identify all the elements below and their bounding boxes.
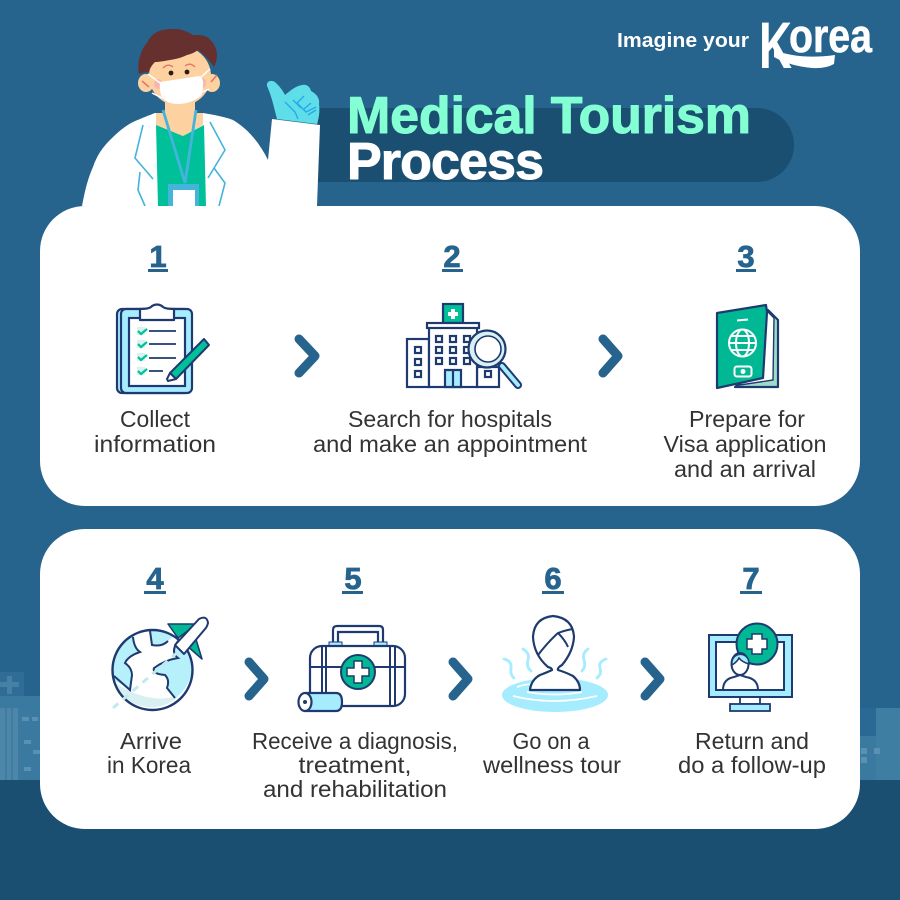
- thumbs-up glove: [267, 81, 319, 124]
- logo wordmark: K: [759, 8, 792, 82]
- neck: [156, 95, 203, 136]
- step 3 number: 3: [737, 239, 755, 274]
- logo wordmark: orea: [789, 9, 873, 62]
- coat body: [82, 113, 320, 206]
- step 6 number: 6: [544, 561, 562, 596]
- arrow: [299, 339, 315, 373]
- step 6 label: wellness tour: [482, 752, 621, 778]
- step 2 number: 2: [443, 239, 461, 274]
- icon: telemedicine monitor: [709, 624, 792, 711]
- face: [138, 46, 220, 106]
- arrow: [453, 662, 468, 696]
- step 4 number: 4: [146, 561, 164, 596]
- step 6 label: Go on a: [512, 728, 590, 754]
- step 1 label: information: [94, 431, 216, 457]
- step 1 number: 1: [149, 239, 167, 274]
- step 7 label: [678, 728, 826, 778]
- step 2 label: and make an appointment: [313, 431, 587, 457]
- step 3 label: [664, 406, 826, 482]
- step 7 number: 7: [742, 561, 760, 596]
- panel: steps 1 to 3: [40, 206, 860, 506]
- panel: steps 4 to 7: [40, 529, 860, 829]
- step 3 label: Visa application: [664, 431, 826, 457]
- step 2 label: [313, 406, 587, 457]
- icon: clipboard: [117, 304, 209, 393]
- lanyard and badge: [163, 110, 199, 206]
- step 4 label: Arrive: [120, 728, 182, 754]
- arrow: [603, 339, 618, 373]
- title banner: [318, 108, 794, 182]
- title line 2: Process: [347, 133, 544, 191]
- step 3 label: and an arrival: [674, 456, 816, 482]
- step 5 label: [252, 728, 458, 802]
- logo wordmark: [759, 8, 873, 82]
- step 6 label: [482, 728, 621, 778]
- step 7 label: Return and: [695, 728, 809, 754]
- step 5 label: Receive a diagnosis,: [252, 728, 458, 754]
- step 7 label: do a follow-up: [678, 752, 826, 778]
- arrow: [645, 662, 660, 696]
- step 5 label: and rehabilitation: [263, 776, 447, 802]
- icon: passport: [717, 305, 778, 388]
- doctor character: [82, 29, 320, 206]
- title line 1: Medical Tourism: [347, 87, 751, 145]
- step 2 label: Search for hospitals: [348, 406, 552, 432]
- title: [347, 87, 751, 191]
- logo: Imagine your Korea: [617, 8, 873, 82]
- logo tagline: Imagine your: [617, 29, 749, 52]
- surgical mask: [148, 69, 210, 104]
- icon: globe and plane: [112, 618, 208, 710]
- step 5 label: treatment,: [298, 752, 412, 778]
- step 5 number: 5: [344, 561, 362, 596]
- step 3 label: Prepare for: [689, 406, 805, 432]
- icon: first aid kit: [298, 626, 405, 711]
- step 4 label: [107, 728, 192, 778]
- step 4 label: in Korea: [107, 752, 192, 778]
- icon: hospital with magnifier: [407, 304, 518, 387]
- coat lapels: [135, 122, 225, 206]
- ground band: [0, 780, 900, 900]
- hair: [138, 29, 217, 74]
- icon: wellness bath: [502, 616, 608, 712]
- scrub top: [156, 125, 206, 206]
- step 1 label: Collect: [120, 406, 190, 432]
- arrow: [249, 662, 264, 696]
- step 1 label: [94, 406, 216, 457]
- city skyline: [0, 672, 900, 780]
